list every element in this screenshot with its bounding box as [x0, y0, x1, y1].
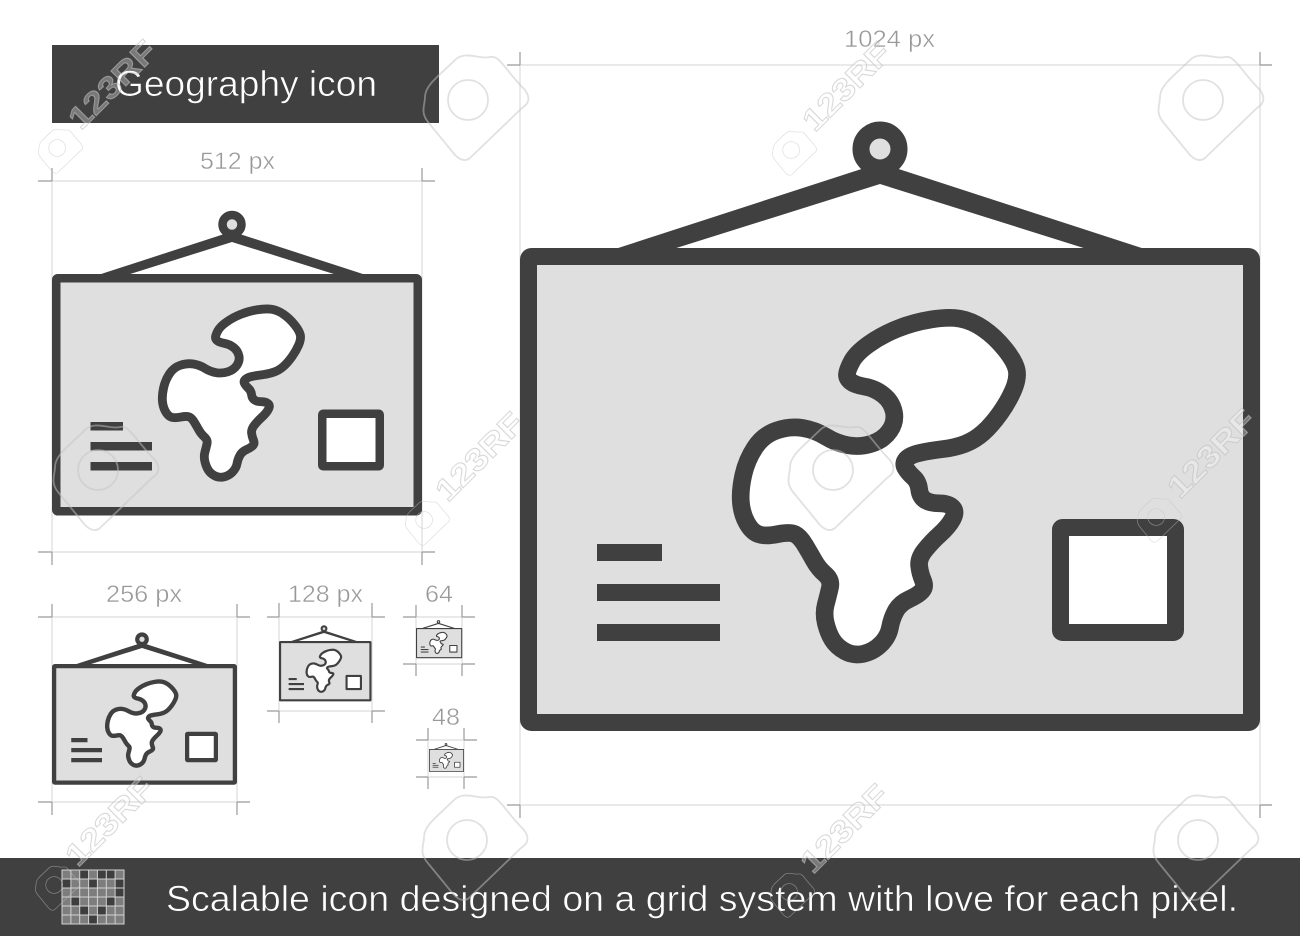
footer bar	[0, 858, 1300, 936]
size guide: 48	[416, 704, 477, 789]
icon: map 1024 px	[528, 130, 1252, 722]
watermark stamps: 123RF	[428, 405, 531, 508]
title banner: Geography icon	[115, 63, 377, 104]
footer caption: Scalable icon designed on a grid system with love for each pixel.	[166, 878, 1238, 919]
size guide: 128 px	[267, 581, 385, 723]
icon: map 64 px	[417, 621, 462, 658]
icon: map 256 px	[54, 634, 235, 783]
watermark stamps: 123RF	[795, 35, 898, 138]
watermark stamps: 123RF	[793, 777, 896, 880]
icon: map 128 px	[280, 626, 370, 700]
size guide: 512 px: 512 px	[200, 148, 275, 175]
watermark stamps: 123RF	[58, 770, 161, 873]
size guide: 64: 64	[425, 581, 453, 608]
icon: map 512 px	[56, 215, 418, 511]
watermark stamps: 123RF	[1160, 402, 1263, 505]
icon: map 48 px	[429, 743, 464, 771]
size guide: 512 px	[38, 148, 435, 565]
size guide: 48: 48	[432, 704, 460, 731]
icon: pixel grid	[62, 870, 124, 924]
size guide: 128 px: 128 px	[288, 581, 363, 608]
size guide: 64	[403, 581, 475, 676]
size guide: 256 px	[38, 581, 250, 815]
size guide: 1024 px: 1024 px	[844, 26, 935, 53]
watermark stamps: 123RF	[61, 33, 164, 136]
size guide: 256 px: 256 px	[106, 581, 182, 608]
title banner	[52, 45, 439, 123]
